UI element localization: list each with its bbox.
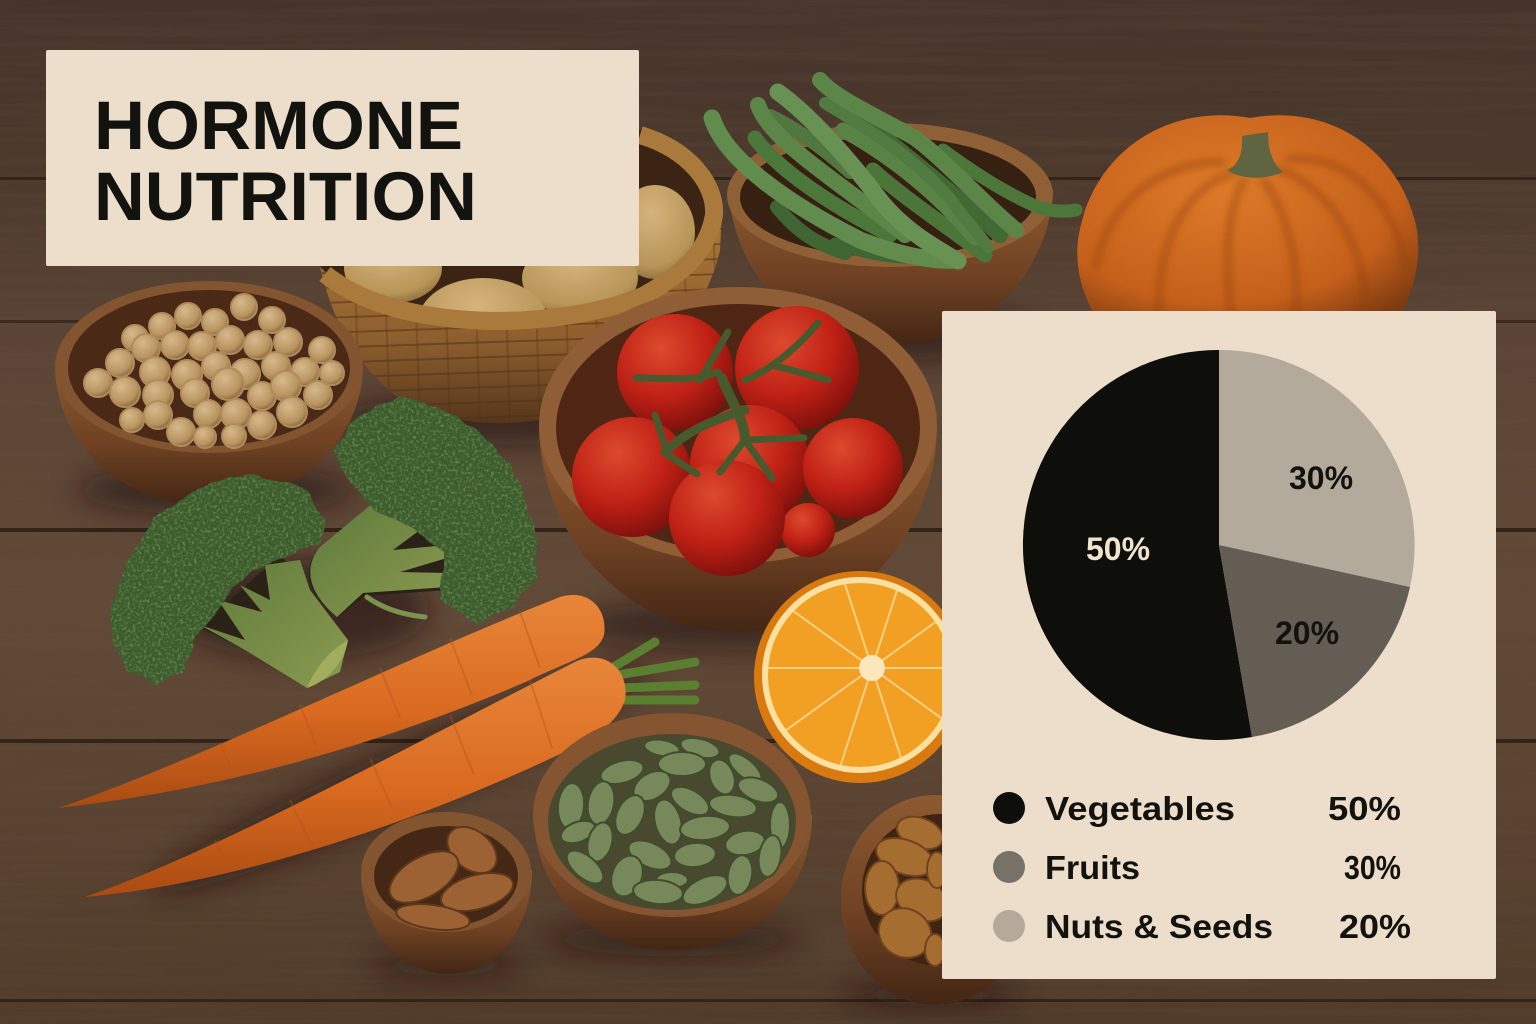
- walnuts: [865, 811, 955, 967]
- bowl of chickpeas: [55, 281, 363, 505]
- legend row: vegetables: [993, 790, 1401, 827]
- carrot tops: [612, 642, 695, 700]
- tomato vine: [636, 323, 828, 478]
- table shadows: [75, 310, 1040, 1007]
- carrot 2: [85, 658, 626, 897]
- legend row: nuts and seeds: Nuts & Seeds: [1045, 908, 1273, 945]
- legend row: vegetables: Vegetables: [1045, 790, 1235, 827]
- legend: [993, 790, 1411, 945]
- pumpkin seeds: [556, 734, 790, 911]
- bowl of walnuts: [841, 795, 1029, 1005]
- legend row: fruits: [993, 849, 1401, 886]
- carrots: [58, 595, 695, 897]
- orange half: [754, 571, 942, 783]
- title text: HORMONE: [94, 87, 463, 164]
- pumpkin: [1077, 115, 1418, 330]
- bowl of pumpkin seeds: [533, 713, 812, 950]
- slice labels: 50%: [1086, 531, 1150, 567]
- bowl of almonds: [361, 812, 532, 974]
- tomatoes: [572, 306, 903, 576]
- broccoli: [113, 400, 533, 688]
- front floret: [113, 478, 348, 688]
- title text: NUTRITION: [94, 158, 477, 235]
- potatoes: [344, 185, 695, 366]
- bowl of tomatoes: [539, 287, 937, 632]
- pie chart: 20%: [1275, 615, 1339, 651]
- legend row: vegetables: 50%: [1328, 790, 1401, 827]
- bowl of green beans: [712, 80, 1076, 345]
- legend row: fruits: Fruits: [1045, 849, 1140, 886]
- carrot 1: [58, 595, 605, 808]
- pie chart: 30%: [1289, 460, 1353, 496]
- legend row: nuts and seeds: [993, 908, 1411, 945]
- back floret: [309, 400, 533, 620]
- wicker basket of potatoes: [320, 130, 722, 423]
- title panel: [46, 50, 639, 266]
- legend row: nuts and seeds: 20%: [1339, 908, 1411, 945]
- pie chart: [1023, 350, 1415, 740]
- almonds: [381, 817, 517, 934]
- legend row: fruits: 30%: [1344, 849, 1401, 886]
- chart panel: [942, 311, 1496, 979]
- pumpkin stem: [1227, 132, 1283, 178]
- chickpeas: [84, 294, 344, 448]
- green beans: [712, 80, 1076, 261]
